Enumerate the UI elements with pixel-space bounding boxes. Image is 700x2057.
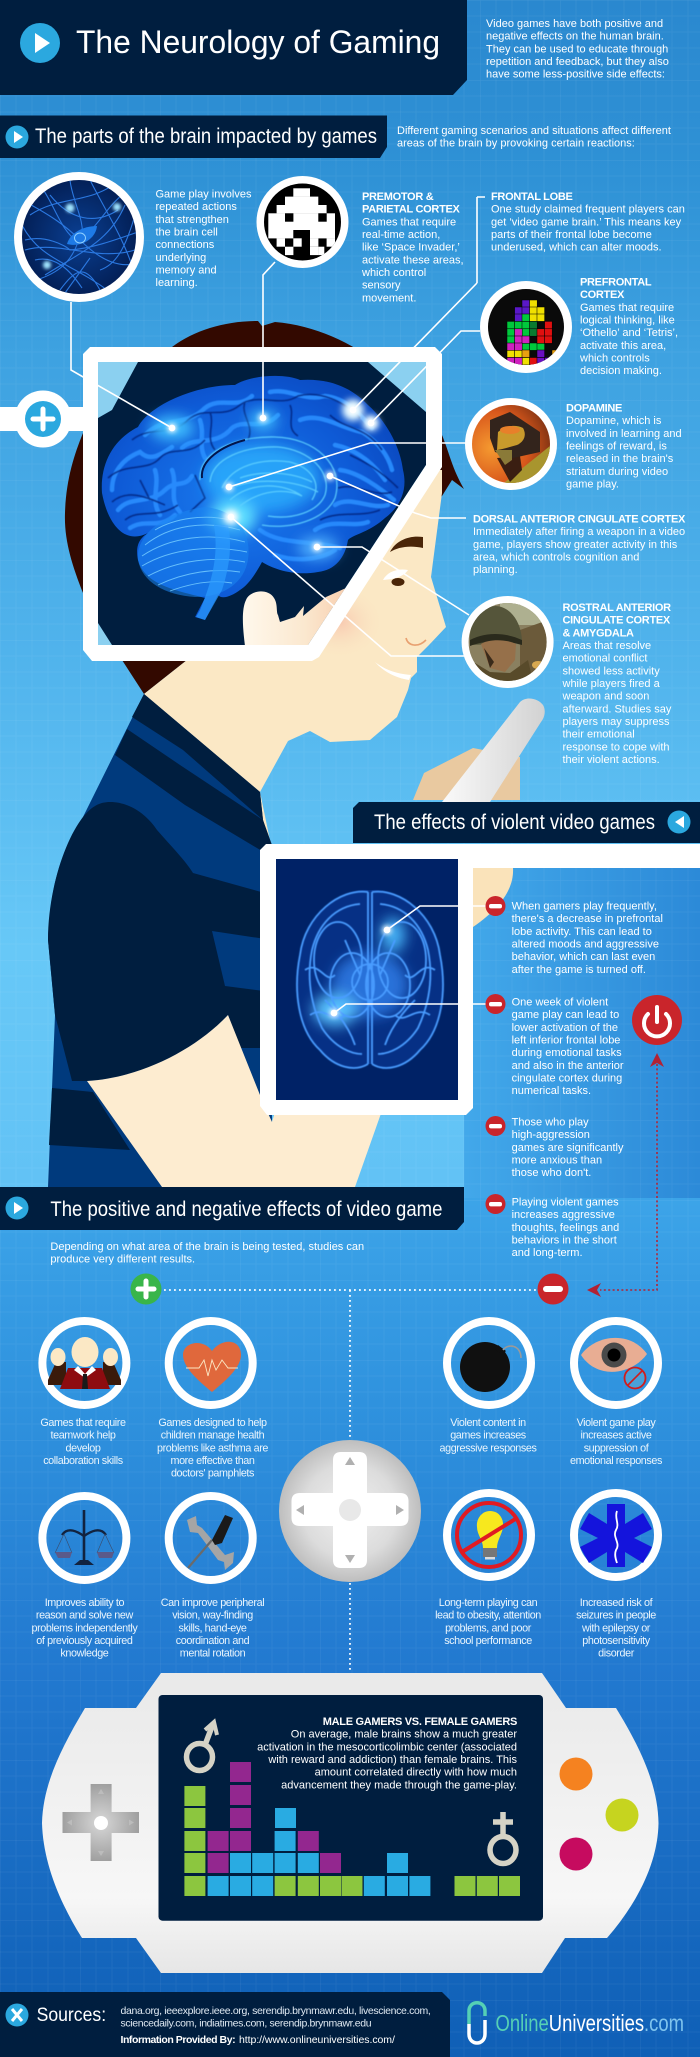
text: effects list: numerical tasks. — [512, 1085, 591, 1097]
text: effects list: more anxious than — [512, 1154, 602, 1166]
text: male vs female: advancement they made through the game-play. — [281, 1779, 517, 1791]
collar stripe — [132, 694, 263, 820]
caption: scales: knowledge — [60, 1648, 109, 1660]
text: game play: learning. — [156, 277, 198, 289]
eye — [383, 569, 408, 586]
text: effects list: after the game is turned off. — [512, 964, 646, 976]
text: dorsal anterior cingulate cortex: game, players show greater activity in this — [473, 539, 678, 551]
text: effects list: during emotional tasks — [512, 1047, 622, 1059]
lower shirt band — [49, 1088, 130, 1150]
text: premotor: activate these areas, — [362, 254, 464, 266]
text: dopamine: game play. — [566, 478, 619, 490]
caption: eye: suppression of — [584, 1442, 650, 1454]
icon: red minus — [538, 1274, 568, 1304]
brain window frame — [83, 347, 442, 661]
text: male vs female: with reward and addiction) than female brains. This — [267, 1754, 517, 1766]
minus icons — [486, 896, 506, 1214]
caption: star of life: seizures in people — [576, 1610, 656, 1622]
text: premotor: PREMOTOR & — [362, 191, 434, 203]
section intro: Different gaming scenarios and situations affect different — [397, 125, 671, 137]
text: prefrontal cortex: activate this area, — [580, 340, 666, 352]
credit: http://www.onlineuniversities.com/ — [239, 2034, 395, 2046]
icon: neuron circle — [14, 172, 144, 302]
text: different results: Depending on what area of the brain is being tested, studies can — [50, 1241, 364, 1253]
caption: scales: Improves ability to — [45, 1597, 124, 1609]
brain panel frame — [260, 844, 700, 1115]
caption: star of life: photosensitivity — [582, 1635, 651, 1647]
caption: star of life: disorder — [598, 1648, 635, 1660]
icon: play small — [6, 1196, 28, 1220]
caption: heart: doctors' pamphlets — [171, 1468, 255, 1480]
text: prefrontal cortex: logical thinking, like — [580, 314, 675, 326]
text: dopamine: released in the brain's — [566, 453, 674, 465]
text: effects list: Those who play — [512, 1116, 589, 1128]
caption: tools: mental rotation — [180, 1648, 246, 1660]
intro text: negative effects on the human brain. — [486, 31, 664, 43]
text: rostral anterior cingulate cortex: CINGULATE CORTEX — [562, 615, 671, 627]
text: game play: memory and — [156, 264, 217, 276]
caption: bomb: Violent content in — [450, 1417, 526, 1429]
icon: eye — [574, 1321, 658, 1405]
footer — [0, 1992, 450, 2057]
glows — [150, 410, 338, 559]
caption: heart: Games designed to help — [158, 1417, 267, 1429]
red dotted arrow — [587, 1053, 664, 1297]
caption: team: collaboration skills — [43, 1455, 124, 1467]
text: effects list: Playing violent games — [512, 1196, 619, 1208]
caption: bulb: school performance — [444, 1635, 532, 1647]
text: effects list: and long-term. — [512, 1247, 583, 1259]
d-pad circle — [279, 1440, 421, 1582]
credit: Information Provided By: — [120, 2034, 235, 2046]
text: premotor: movement. — [362, 292, 416, 304]
icon: star of life — [574, 1493, 658, 1577]
cerebellum — [138, 507, 249, 597]
text: effects list: games are significantly — [512, 1142, 624, 1154]
text: dopamine: feelings of reward, is — [566, 440, 667, 452]
text: frontal lobe: underused, which can alter moods. — [491, 242, 662, 254]
shirt sleeve and torso — [48, 802, 272, 1081]
text: frontal lobe: FRONTAL LOBE — [491, 191, 573, 203]
caption: heart: children manage health — [161, 1430, 265, 1442]
icon: x — [6, 2004, 28, 2026]
section heading: violent games — [353, 802, 700, 843]
text: rostral anterior cingulate cortex: their emotional — [562, 729, 635, 741]
icon: play — [20, 23, 60, 63]
text: rostral anterior cingulate cortex: emotional conflict — [562, 653, 648, 665]
head interior — [98, 362, 426, 646]
text: prefrontal cortex: Games that require — [580, 302, 674, 314]
text: dopamine: involved in learning and — [566, 428, 682, 440]
hand — [413, 748, 520, 800]
caption: bulb: lead to obesity, attention — [435, 1610, 541, 1622]
text: effects list: thoughts, feelings and — [512, 1222, 619, 1234]
section heading: positive and negative: The positive and negative effects of video game — [50, 1198, 442, 1221]
text: premotor: which control — [361, 267, 426, 279]
caption: star of life: with epilepsy or — [581, 1622, 651, 1634]
chest stripe — [115, 729, 272, 851]
caption: scales: reason and solve new — [36, 1610, 134, 1622]
text: rostral anterior cingulate cortex: & AMYGDALA — [562, 627, 634, 639]
bar chart — [184, 1762, 520, 1896]
text: frontal lobe: get ‘video game brain.’ This means key — [491, 216, 682, 228]
text: prefrontal cortex: decision making. — [580, 365, 662, 377]
text: effects list: behaviors in the short — [512, 1234, 617, 1246]
caption: tools: Can improve peripheral — [161, 1597, 264, 1609]
cheek blush — [295, 584, 385, 660]
face and neck — [144, 470, 446, 900]
text: male vs female: MALE GAMERS VS. FEMALE GAMERS — [323, 1716, 517, 1728]
section heading: violent games: The effects of violent video games — [374, 811, 655, 834]
buttons — [560, 1758, 638, 1870]
text: effects list: cingulate cortex during — [512, 1072, 622, 1084]
intro text: have some less-positive side effects: — [486, 69, 665, 81]
text: game play: underlying — [156, 252, 206, 264]
text: effects list: altered moods and aggressive — [512, 938, 659, 950]
text: dopamine: DOPAMINE — [566, 402, 622, 414]
text: male vs female: amount correlated directly with how much — [315, 1767, 517, 1779]
game console — [42, 1673, 658, 1973]
caption: eye: Violent game play — [577, 1417, 656, 1429]
skin and ear — [243, 588, 346, 646]
caption: tools: vision, way-finding — [172, 1610, 253, 1622]
text: prefrontal cortex: which controls — [579, 352, 650, 364]
brain illustration — [102, 376, 404, 620]
text: frontal lobe: parts of their frontal lobe become — [491, 229, 652, 241]
text: dorsal anterior cingulate cortex: area, which controls cognition and — [473, 552, 639, 564]
icon: no light bulb — [447, 1493, 531, 1577]
header bar — [0, 0, 467, 95]
text: effects list: When gamers play frequently, — [512, 900, 657, 912]
text: effects list: those who don't. — [512, 1167, 591, 1179]
icon: helmet warrior — [465, 398, 557, 490]
icon: left arrow — [668, 810, 690, 834]
text: rostral anterior cingulate cortex: while players fired a — [562, 678, 661, 690]
title: The Neurology of Gaming — [76, 24, 440, 60]
text: game play: connections — [156, 239, 215, 251]
sources heading: Sources: — [37, 2005, 106, 2026]
text: male vs female: activation in the mesocorticolimbic center (associated — [257, 1741, 517, 1753]
logo: OnlineUniversities.com — [496, 2010, 684, 2036]
caption: bulb: Long-term playing can — [439, 1597, 538, 1609]
text: premotor: like ‘Space Invader,’ — [362, 242, 460, 254]
left d-pad — [62, 1784, 139, 1861]
text: dorsal anterior cingulate cortex: planning. — [473, 564, 518, 576]
eyebrow — [390, 537, 423, 552]
leader lines — [71, 197, 485, 656]
text: effects list: lobe activity. This can lead to — [512, 926, 652, 938]
shirt — [48, 694, 272, 1187]
text: game play: Game play involves — [156, 188, 252, 200]
text: rostral anterior cingulate cortex: weapon and soon — [562, 691, 649, 703]
section heading: parts of the brain — [0, 116, 387, 158]
logo — [469, 2003, 684, 2043]
text: rostral anterior cingulate cortex: players may suppress — [562, 716, 670, 728]
text: effects list: high-aggression — [512, 1129, 590, 1141]
icon: green plus — [130, 1274, 162, 1304]
text: prefrontal cortex: PREFRONTAL — [580, 276, 652, 288]
arm — [87, 1015, 384, 1187]
text: dorsal anterior cingulate cortex: DORSAL ANTERIOR CINGULATE CORTEX — [473, 514, 686, 526]
caption: eye: emotional responses — [570, 1455, 663, 1467]
text: frontal lobe: One study claimed frequent players can — [491, 204, 685, 216]
caption: team: teamwork help — [50, 1430, 116, 1442]
text: effects list: game play can lead to — [512, 1009, 619, 1021]
text: effects list — [512, 900, 663, 1259]
text: effects list: there's a decrease in prefrontal — [512, 913, 663, 925]
smile — [375, 662, 411, 680]
caption: eye: increases active — [580, 1430, 652, 1442]
text: rostral anterior cingulate cortex: afterward. Studies say — [562, 703, 672, 715]
icon: heart — [169, 1321, 253, 1405]
section heading: positive and negative — [0, 1187, 464, 1230]
text: rostral anterior cingulate cortex: their violent actions. — [562, 754, 660, 766]
text: effects list: behavior, which can last even — [512, 951, 655, 963]
intro text: repetition and feedback, but they also — [486, 56, 669, 68]
icon: space invader — [256, 176, 348, 268]
caption: tools: skills, hand-eye — [178, 1622, 247, 1634]
brain highlight dots — [169, 407, 374, 550]
text: dopamine: Dopamine, which is — [566, 415, 662, 427]
text: premotor: sensory — [362, 280, 401, 292]
text: rostral anterior cingulate cortex: Areas that resolve — [562, 640, 651, 652]
text: effects list: lower activation of the — [512, 1022, 618, 1034]
text: rostral anterior cingulate cortex: response to cope with — [562, 741, 670, 753]
icon: tools — [169, 1496, 253, 1580]
text: premotor: real-time action, — [362, 229, 440, 241]
text: prefrontal cortex: CORTEX — [580, 289, 625, 301]
caption: bomb: games increases — [450, 1430, 527, 1442]
text: effects list: left inferior frontal lobe — [512, 1034, 620, 1046]
caption: team: develop — [65, 1442, 101, 1454]
text: effects list: One week of violent — [512, 996, 608, 1008]
text: prefrontal cortex: ‘Othello’ and ‘Tetris’, — [580, 327, 678, 339]
text: game play: the brain cell — [156, 226, 218, 238]
text: different results: produce very different results. — [50, 1254, 195, 1266]
icon: female symbol — [490, 1812, 516, 1864]
caption: bomb: aggressive responses — [439, 1442, 538, 1454]
icon: male symbol — [186, 1722, 217, 1770]
intro text: They can be used to educate through — [486, 43, 668, 55]
caption: team: Games that require — [40, 1417, 126, 1429]
caption: scales: of previously acquired — [36, 1635, 133, 1647]
game controller held in hand — [442, 698, 545, 802]
text: game play: repeated actions — [156, 201, 237, 213]
icon: team — [42, 1321, 126, 1405]
text: premotor: Games that require — [362, 216, 456, 228]
forearm behind panel — [473, 868, 513, 927]
text: dopamine: striatum during video — [566, 466, 668, 478]
icon: scales — [42, 1496, 126, 1580]
icon: power button — [632, 995, 682, 1045]
caption: bulb: problems, and poor — [445, 1622, 532, 1634]
text: effects list: increases aggressive — [512, 1209, 615, 1221]
caption: heart: more effective than — [170, 1455, 255, 1467]
icon: play small — [6, 126, 28, 148]
sources list: dana.org, ieeexplore.ieee.org, serendip.brynmawr.edu, livescience.com, — [120, 2005, 430, 2017]
caption: heart: problems like asthma are — [157, 1442, 268, 1454]
icon: bomb — [447, 1321, 531, 1405]
text: rostral anterior cingulate cortex: showed less activity — [562, 665, 660, 677]
caption: scales: problems independently — [31, 1622, 138, 1634]
top-view brain — [297, 890, 443, 1068]
brain stem — [196, 525, 230, 620]
hair — [65, 321, 464, 694]
dotted connectors — [164, 1290, 536, 1675]
section intro: areas of the brain by provoking certain reactions: — [397, 138, 635, 150]
console screen — [158, 1695, 543, 1921]
icon: tetris — [480, 281, 572, 373]
text: male vs female: On average, male brains show a much greater — [291, 1729, 517, 1741]
nostril — [406, 638, 426, 645]
caption: star of life: Increased risk of — [580, 1597, 654, 1609]
text: effects list: and also in the anterior — [512, 1060, 624, 1072]
sources list: sciencedaily.com, indiatimes.com, serendip.brynmawr.edu — [120, 2018, 372, 2030]
intro text: Video games have both positive and — [486, 18, 663, 30]
text: game play: that strengthen — [156, 214, 229, 226]
section heading: parts of the brain: The parts of the brain impacted by games — [35, 125, 377, 148]
caption: tools: coordination and — [176, 1635, 250, 1647]
icon: soldier — [462, 596, 554, 690]
limbic rings — [200, 437, 337, 526]
plus tab — [0, 390, 84, 448]
text: dorsal anterior cingulate cortex: Immediately after firing a weapon in a video — [473, 526, 685, 538]
text: premotor: PARIETAL CORTEX — [362, 204, 461, 216]
text: rostral anterior cingulate cortex: ROSTRAL ANTERIOR — [562, 602, 671, 614]
character: boy playing a game — [48, 321, 545, 1187]
